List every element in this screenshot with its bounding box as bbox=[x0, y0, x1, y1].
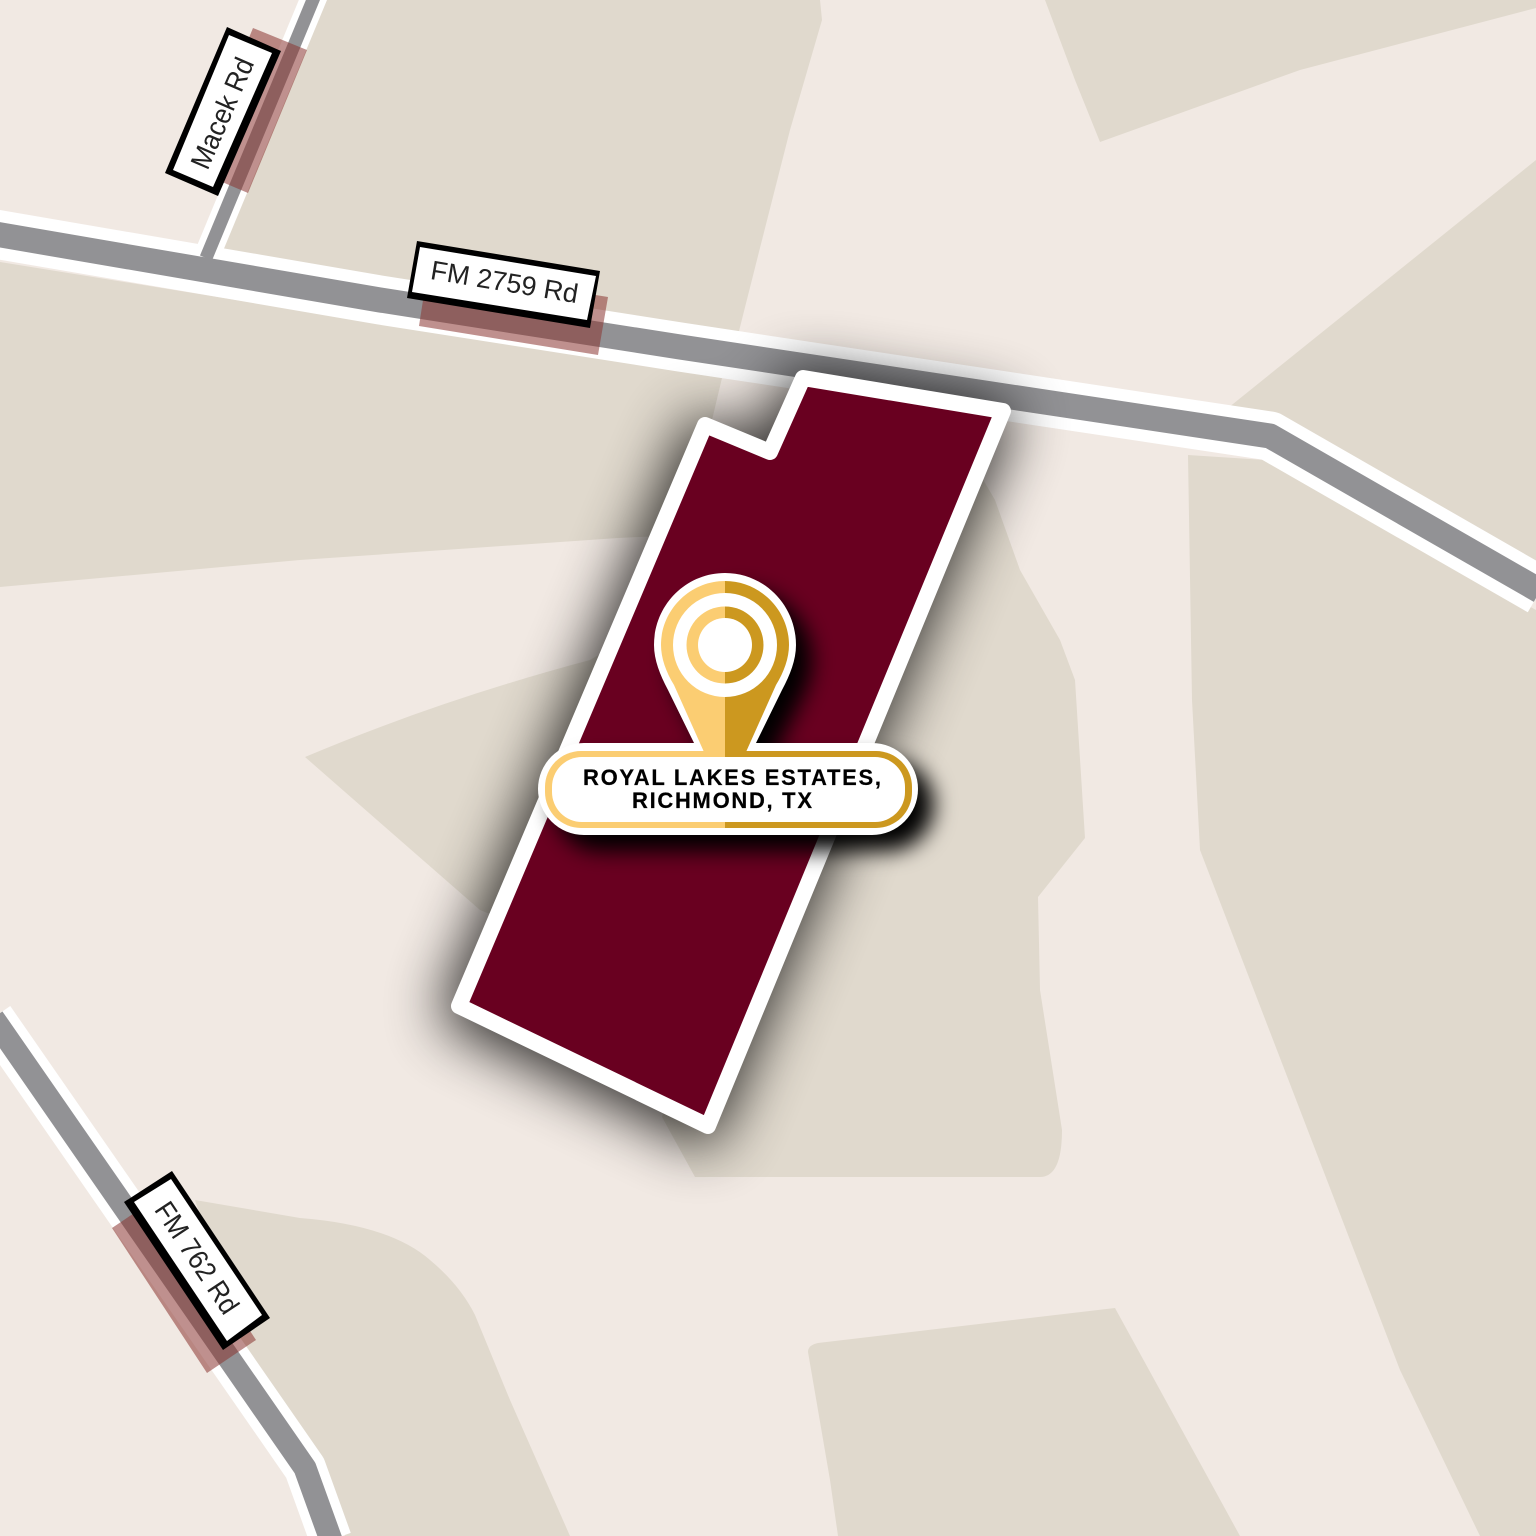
road label: Macek Rd bbox=[165, 27, 307, 196]
parcel: Royal Lakes Estates site bbox=[459, 378, 1003, 1126]
road label: FM 762 Rd: FM 762 Rd bbox=[149, 1196, 245, 1320]
road label: FM 762 Rd bbox=[112, 1171, 270, 1373]
label pill border bbox=[545, 751, 912, 828]
parcel shadow bbox=[455, 384, 999, 1132]
icon: map pin bbox=[538, 573, 918, 835]
road label: FM 2759 Rd: FM 2759 Rd bbox=[429, 255, 580, 309]
road label: Macek Rd: Macek Rd bbox=[185, 53, 260, 173]
road label: FM 2759 Rd bbox=[407, 241, 608, 355]
location marker badge bbox=[538, 573, 918, 835]
site name text: RICHMOND, TX bbox=[632, 788, 812, 813]
location marker shadow bbox=[554, 589, 934, 851]
site name text: ROYAL LAKES ESTATES, bbox=[583, 765, 881, 790]
